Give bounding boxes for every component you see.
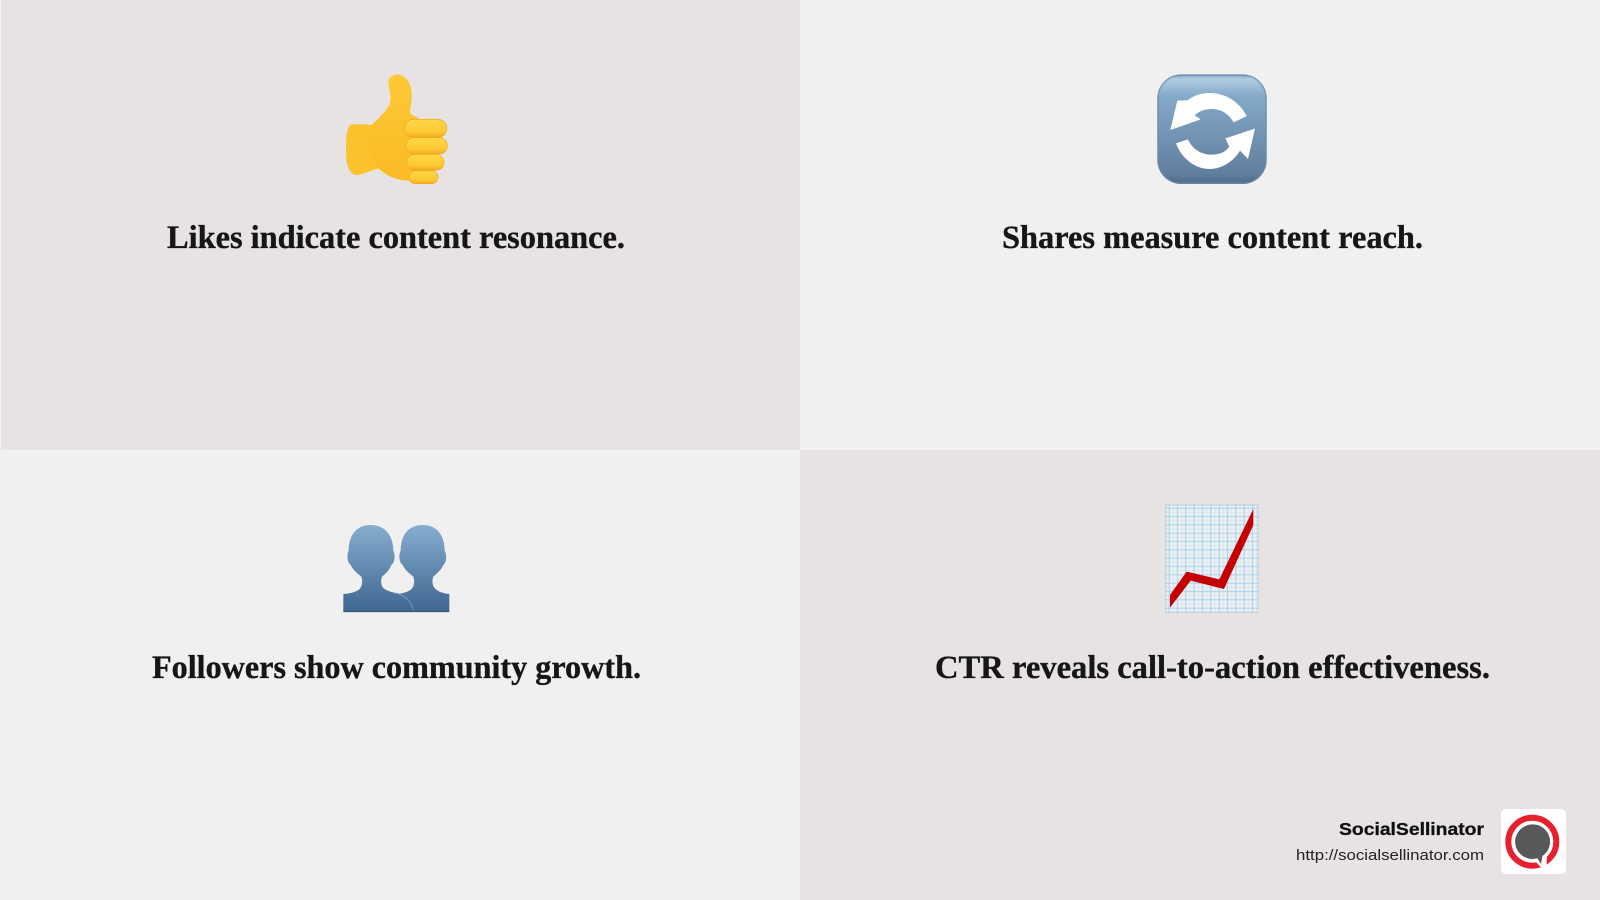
panel: shares <box>800 0 1600 450</box>
panel: click-through rate <box>800 450 1600 900</box>
icon: thumbs up <box>346 75 447 184</box>
heading: likes: Likes indicate content resonance. <box>167 220 625 256</box>
panel: likes <box>0 0 800 450</box>
icon: logo <box>1501 809 1566 874</box>
icon: refresh arrows <box>1157 74 1267 184</box>
heading: click-through rate: CTR reveals call-to-action effectiveness. <box>935 650 1490 686</box>
icon: two silhouettes <box>343 525 449 612</box>
heading: shares: Shares measure content reach. <box>1002 220 1423 256</box>
icon: rising chart <box>1165 504 1259 613</box>
heading: followers: Followers show community growth. <box>152 650 641 686</box>
panel: followers <box>0 450 800 900</box>
brand url: http://socialsellinator.com <box>1296 847 1484 864</box>
brand name: SocialSellinator <box>1339 819 1484 839</box>
